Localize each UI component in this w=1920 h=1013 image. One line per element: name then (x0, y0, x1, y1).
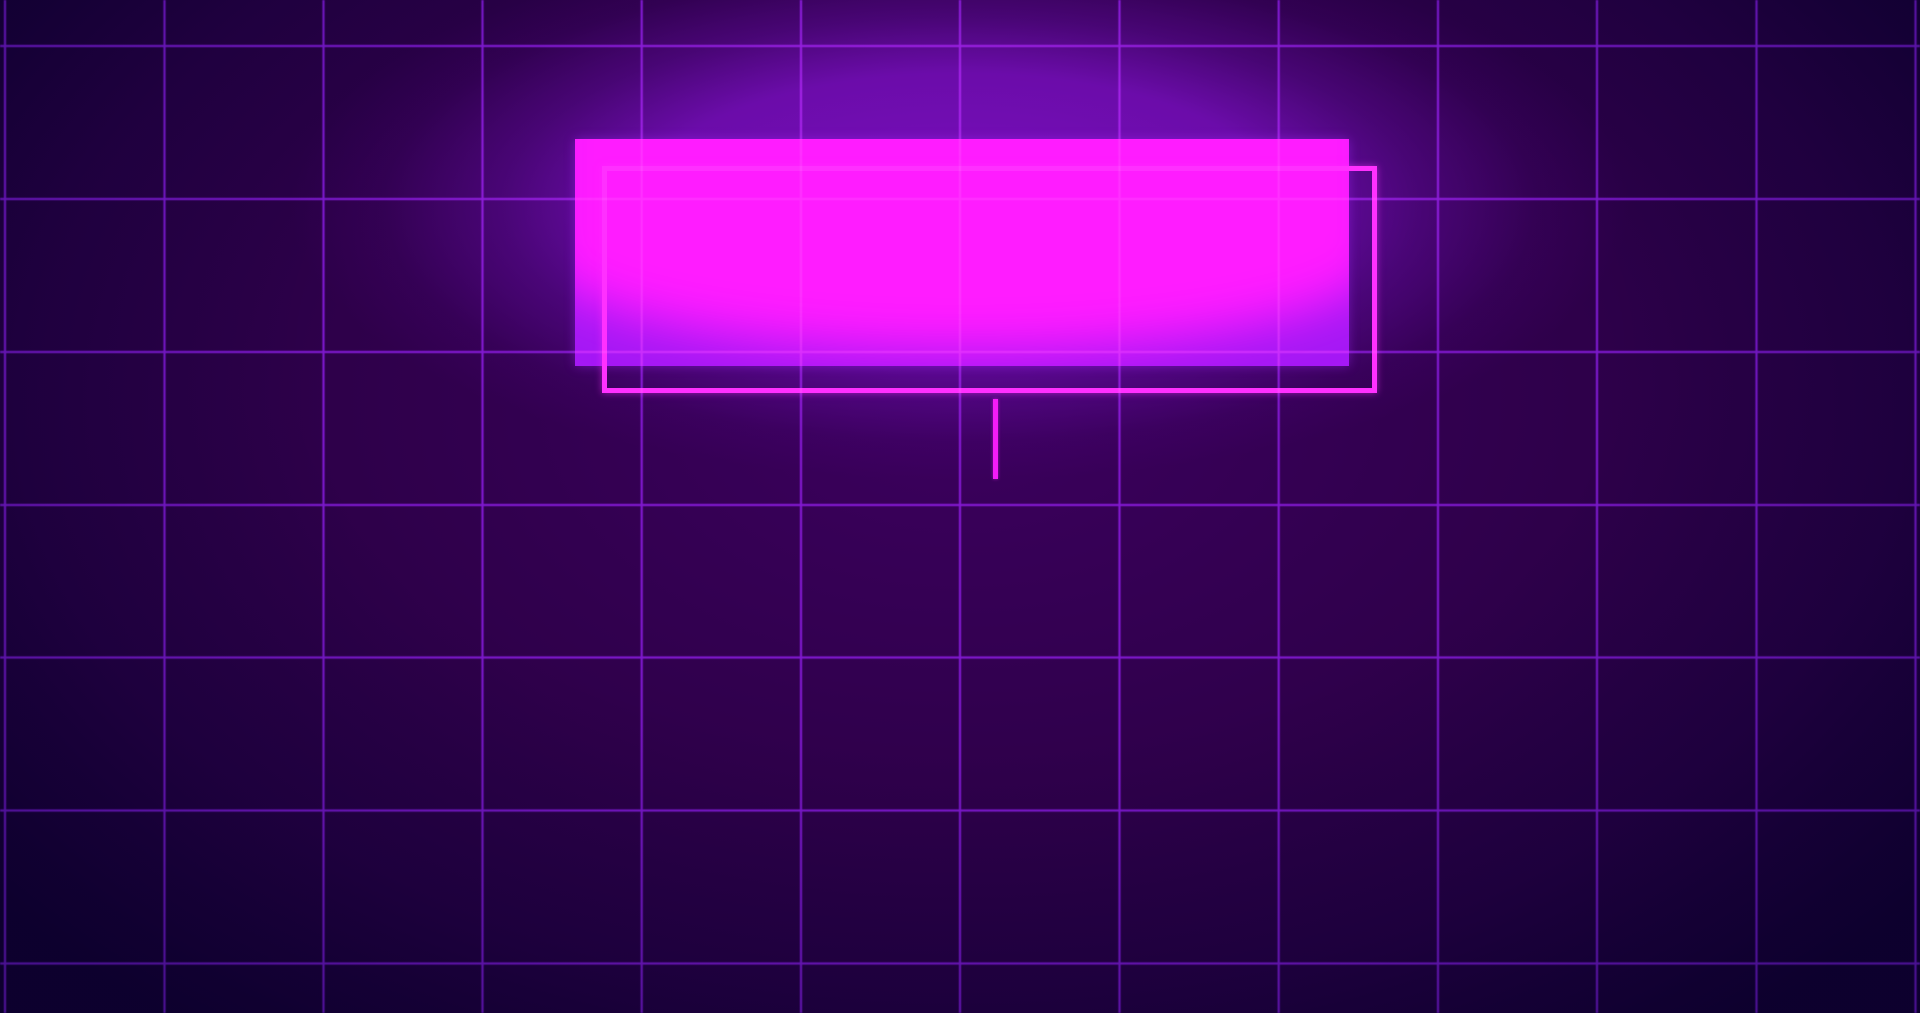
neon vertical tick (993, 399, 998, 479)
panel: filled magenta rectangle (575, 139, 1349, 366)
magenta glow inside rectangle (541, 0, 1383, 351)
panel: offset neon outline (602, 166, 1377, 393)
